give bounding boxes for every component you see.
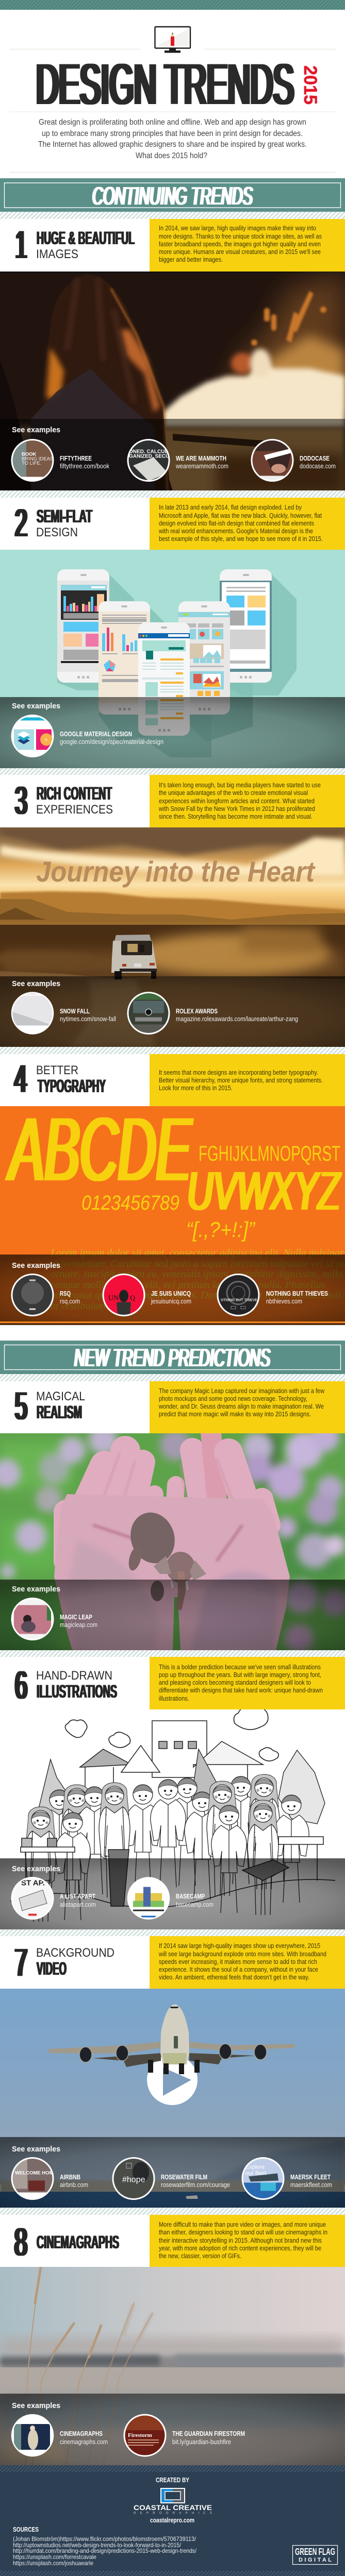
- example: snow fall: SNOW FALL: [60, 1007, 90, 1015]
- section 7 yellow description: video. An ambient, ethereal feels that doesn't get in the way.: [159, 1973, 309, 1981]
- section 6 yellow description: pop up throughout the years. But with large imagery, strong font,: [159, 1671, 321, 1679]
- example: basecamp: BASECAMP: [176, 1892, 205, 1900]
- section 4 yellow description: [150, 1054, 345, 1106]
- example: we are mammoth: ONED. CALCUL: [129, 449, 168, 454]
- example: je suis unicq: Q: [130, 1294, 135, 1302]
- example: fiftythree: BRING IDEAS: [22, 456, 53, 462]
- example: the guardian firestorm: [124, 2415, 245, 2456]
- logo: coastal creative: [134, 2488, 212, 2515]
- examples overlay: [0, 1255, 345, 1325]
- sources list: [13, 2535, 197, 2567]
- trees: [39, 1749, 325, 1824]
- sources list: https://unsplash.com/joshuaearle: [13, 2560, 93, 2567]
- photo: airplane: [0, 1989, 345, 2208]
- section 8 heading: CINEMAGRAPHS: [37, 2232, 119, 2252]
- section 7 heading: BACKGROUND: [36, 1946, 114, 1960]
- see examples label: See examples: [12, 1585, 60, 1594]
- example: nothing but thieves: OTHING BUT THIEVE: [221, 1298, 257, 1302]
- example: magic leap: MAGIC LEAP: [60, 1613, 92, 1621]
- example: the guardian firestorm: THE GUARDIAN FIRESTORM: [172, 2430, 245, 2437]
- section 3 yellow description: the unique advantages of the web to create emotional visual: [159, 789, 308, 796]
- punctuation: “[.,?+!:]”: [186, 1217, 256, 1242]
- section 7 heading: 7: [15, 1941, 27, 1985]
- example: rolex awards: magazine.rolexawards.com/laureate/arthur-zang: [176, 1015, 298, 1023]
- created by credit: CREATED BY: [156, 2476, 189, 2484]
- illustration: hand-drawn crowd: [0, 1706, 345, 1929]
- section 1 yellow description: In 2014, we saw large, high quality images make their way into: [159, 224, 316, 232]
- type specimen panel: [0, 1099, 345, 1321]
- sources list: http://uptownstudios.net/web-design-trends-to-look-forward-to-in-2015/: [13, 2541, 182, 2549]
- example: we are mammoth: [128, 440, 228, 481]
- example: rolex awards: [128, 992, 298, 1033]
- banner: new trend predictions: [0, 1341, 345, 1374]
- logo: coastal creative: COASTAL CREATIVE: [134, 2503, 212, 2512]
- example: snow fall: nytimes.com/snow-fall: [60, 1015, 116, 1023]
- numerals: 0123456789: [81, 1192, 179, 1214]
- section 6 yellow description: [150, 1657, 345, 1709]
- section 3 heading: [15, 779, 113, 823]
- buildings: [80, 1721, 263, 1803]
- grass stalks: [26, 2267, 153, 2465]
- example: rolex awards: ROLEX AWARDS: [176, 1007, 218, 1015]
- example: airbnb: WELCOME HOME: [15, 2170, 57, 2176]
- example: dodocase: dodocase.com: [300, 462, 336, 470]
- section 3 heading: RICH CONTENT: [37, 784, 112, 804]
- example: je suis unicq: JE SUIS UNICQ: [151, 1290, 191, 1297]
- hatch band: [0, 490, 345, 498]
- brush lettering: Journey into the Heart: [36, 855, 316, 888]
- section 7: background video: [0, 1936, 345, 2208]
- example: rosewater film: ROSEWATER FILM: [161, 2173, 207, 2181]
- example: airbnb: AIRBNB: [60, 2173, 80, 2181]
- section 1 heading: [15, 223, 135, 267]
- example: google material design: GOOGLE MATERIAL DESIGN: [60, 730, 132, 738]
- phone shadows: [57, 574, 297, 757]
- example: rosewater film: rosewaterfilm.com/courage: [161, 2181, 230, 2189]
- example: airbnb: airbnb.com: [60, 2181, 88, 2189]
- section 5 heading: REALISM: [37, 1402, 82, 1422]
- see examples label: See examples: [12, 2145, 60, 2154]
- section 2 heading: 2: [15, 501, 27, 545]
- example: cinemagraphs: [12, 2415, 108, 2456]
- section 8 heading: 8: [14, 2221, 27, 2264]
- section 5 heading: [15, 1384, 85, 1428]
- example: nothing but thieves: NOTHING BUT THIEVES: [266, 1290, 328, 1297]
- section 1 yellow description: bigger and better images.: [159, 256, 223, 263]
- section 7 heading: VIDEO: [37, 1959, 67, 1979]
- example: fiftythree: FIFTYTHREE: [60, 454, 92, 462]
- section 6 yellow description: This is a bolder prediction because we've seen small illustrations: [159, 1663, 321, 1671]
- example: a list apart: alistapart.com: [60, 1901, 96, 1908]
- see examples label: See examples: [12, 1262, 60, 1270]
- example: maersk fleet: our fleet: [245, 2170, 266, 2176]
- example: the guardian firestorm: Firestorm: [128, 2432, 152, 2438]
- sources list: https://unsplash.com/forrestcavale: [13, 2553, 96, 2561]
- icon: play button: [147, 2055, 198, 2105]
- section 8: cinemagraphs: [0, 2215, 345, 2465]
- examples overlay: [0, 1580, 345, 1650]
- example: magic leap: [12, 1598, 97, 1639]
- section 1: huge and beautiful images: [0, 219, 345, 495]
- section 4 heading: TYPOGRAPHY: [38, 1076, 106, 1096]
- section 4 yellow description: Look for more of this in 2015.: [159, 1084, 233, 1092]
- section 6 yellow description: illustrations.: [159, 1694, 189, 1702]
- section 3 yellow description: with Snow Fall by the New York Times in 2012 has proliferated: [158, 805, 315, 812]
- section 6 heading: HAND-DRAWN: [36, 1669, 112, 1683]
- hatch band: [0, 768, 345, 775]
- section 2 heading: [15, 501, 92, 545]
- example: a list apart: A LIST APART: [60, 1892, 95, 1900]
- section 7 yellow description: experience. It shows the soul of a company, without in your face: [159, 1965, 318, 1973]
- example: magic leap: magicleap.com: [60, 1621, 97, 1629]
- phone front: [138, 622, 190, 736]
- section 5: magical realism: [0, 1381, 345, 1654]
- see examples label: See examples: [12, 1865, 60, 1873]
- example: cinemagraphs: CINEMAGRAPHS: [60, 2430, 103, 2437]
- section 2 yellow description: [150, 498, 345, 550]
- section 4 heading: 4: [14, 1057, 27, 1101]
- phone right back: [220, 569, 272, 683]
- logo: coastal creative: REPROGRAPHICS: [134, 2511, 212, 2515]
- example: maersk fleet: Explore: [245, 2164, 265, 2170]
- example: the guardian firestorm: bit.ly/guardian-bushfire: [172, 2438, 231, 2446]
- section 7 heading: [15, 1941, 114, 1985]
- section 6 heading: 6: [15, 1664, 27, 1707]
- section 8 yellow description: the new, classier, version of GIFs.: [159, 2252, 241, 2260]
- section 4: better typography: [0, 1054, 345, 1325]
- section 6 heading: [15, 1664, 117, 1707]
- section 1 yellow description: [150, 219, 345, 272]
- intro paragraph: [38, 118, 307, 160]
- see examples label: See examples: [12, 426, 60, 434]
- tables and ground: [10, 1837, 335, 1908]
- example: dodocase: [252, 440, 336, 481]
- examples overlay: [0, 976, 345, 1047]
- phone centre left: [98, 601, 150, 715]
- hatch band: [0, 1374, 345, 1381]
- example: fiftythree: BOOK: [22, 451, 37, 457]
- hatch band: [0, 2208, 345, 2215]
- sources list: http://hurrdat.com/branding-and-design/predictions-2015-web-design-trends/: [13, 2547, 197, 2554]
- example: maersk fleet: [242, 2158, 332, 2199]
- examples overlay: [0, 2137, 345, 2208]
- sources heading: SOURCES: [13, 2526, 39, 2533]
- example: nothing but thieves: [218, 1275, 328, 1316]
- example: basecamp: basecamp.com: [176, 1901, 213, 1908]
- hatch band: [0, 1047, 345, 1054]
- section 8 yellow description: [150, 2215, 345, 2267]
- example: we are mammoth: WE ARE MAMMOTH: [176, 454, 226, 462]
- section 2 yellow description: with real world enhancements. Google's Material design is the: [158, 527, 313, 535]
- example: fiftythree: fiftythree.com/book: [60, 462, 109, 470]
- section 1 heading: 1: [15, 223, 27, 267]
- example: basecamp: [128, 1877, 213, 1919]
- example: rsq: rsq.com: [60, 1297, 80, 1305]
- top striped band: [0, 0, 345, 10]
- hatch band: [0, 1929, 345, 1936]
- year 2015, rotated: 2015: [300, 65, 320, 105]
- example: snow fall: [12, 992, 116, 1033]
- intro paragraph: What does 2015 hold?: [136, 151, 207, 160]
- hatch band: [0, 212, 345, 219]
- section 3 yellow description: since then. Storytelling has become more intimate and visual.: [159, 812, 313, 820]
- examples overlay: [0, 2394, 345, 2465]
- examples overlay: [0, 697, 345, 768]
- example: a list apart: ST AP.: [21, 1878, 45, 1888]
- logo: green flag digital: [293, 2545, 337, 2565]
- large alphabet: ABCDE: [7, 1099, 192, 1200]
- banner: continuing trends: [0, 178, 345, 212]
- clouds: [65, 1706, 278, 1761]
- hatch band: [0, 1650, 345, 1657]
- sources list: (Johan Blomström)https://www.flickr.com/photos/blomstroem/5706739113/: [13, 2535, 196, 2543]
- van: [111, 935, 157, 979]
- example: je suis unicq: UN: [108, 1294, 119, 1302]
- example: google material design: google.com/design/spec/material-design: [60, 738, 163, 745]
- example: rosewater film: #hope: [122, 2175, 145, 2184]
- lorem ipsum serif: congue mollis, tempus elit, vel pretium lectus quis nulla. Phasellus: [51, 1279, 325, 1291]
- section 3: rich content experiences: [0, 775, 345, 1047]
- section 6 heading: ILLUSTRATIONS: [37, 1682, 117, 1702]
- examples overlay: [0, 1858, 345, 1929]
- example: a list apart: [12, 1877, 96, 1919]
- section 6 yellow description: and pleasing colors becoming standard designers will look to: [159, 1679, 311, 1686]
- section 2 yellow description: In late 2013 and early 2014, flat design exploded. Led by: [159, 503, 302, 511]
- elephant: [124, 1506, 206, 1610]
- lorem ipsum serif: consequat quam, vestibulum mattis. Donec sit amet lorem massa. Duis: [51, 1290, 342, 1301]
- example: google material design: [12, 715, 163, 756]
- hand: palms: [54, 1494, 290, 1650]
- section 2 heading: DESIGN: [36, 526, 78, 539]
- section 8 heading: [14, 2221, 119, 2264]
- section 3 heading: 3: [15, 779, 27, 823]
- hand: fingers: [66, 1427, 269, 1561]
- illustration: flat phones: [0, 550, 345, 768]
- see examples label: See examples: [12, 702, 60, 710]
- see examples label: See examples: [12, 2402, 60, 2410]
- examples overlay: [0, 419, 345, 490]
- see examples label: See examples: [12, 980, 60, 988]
- example: we are mammoth: wearemammoth.com: [175, 462, 228, 470]
- phone left back: [57, 569, 109, 683]
- section 5 yellow description: [150, 1381, 345, 1433]
- example: cinemagraphs: cinemagraphs.com: [60, 2438, 108, 2446]
- section 3 heading: EXPERIENCES: [36, 803, 113, 817]
- example: je suis unicq: jesuisunicq.com: [151, 1297, 191, 1305]
- section 5 heading: 5: [15, 1384, 27, 1428]
- section 8 yellow description: year, with more adoption of rich content experiences, they will be: [159, 2244, 321, 2252]
- section 7 yellow description: speeds ever increasing, it makes more sense to add to that rich: [159, 1958, 317, 1965]
- company url: coastalrepro.com: [150, 2516, 194, 2524]
- section 5 heading: MAGICAL: [36, 1389, 85, 1403]
- example: dodocase: DODOCASE: [300, 454, 330, 462]
- section 1 heading: IMAGES: [36, 247, 78, 261]
- example: we are mammoth: GANIZED. SECU: [129, 453, 169, 460]
- section 4 yellow description: It seems that more designs are incorporating better typography.: [159, 1069, 318, 1076]
- photo: elephant in hands: [0, 1423, 345, 1654]
- lorem ipsum serif: [50, 1247, 345, 1312]
- lorem ipsum serif: at vestibulum nisi.: [51, 1300, 126, 1312]
- section 5 yellow description: photo mockups and some good news coverage. Technology,: [159, 1395, 307, 1402]
- section 3 yellow description: [150, 775, 345, 827]
- example: je suis unicq: [103, 1275, 191, 1316]
- example: rosewater film: [113, 2158, 230, 2199]
- airplane: [48, 2004, 295, 2074]
- example: google material design: +: [44, 737, 47, 743]
- section 8 yellow description: their interactive storytelling in 2015. Although not brand new this: [159, 2236, 322, 2244]
- section 2 yellow description: design evolved into flat-ish design that combined flat elements: [159, 519, 314, 527]
- photo: grass stalks and fog: [0, 2267, 345, 2465]
- section 5 yellow description: predict that more magic will make its way into 2015 designs.: [159, 1410, 311, 1418]
- section 2: semi-flat design: [0, 498, 345, 768]
- example: rsq: [12, 1275, 80, 1316]
- crowd figures: [25, 1774, 309, 1922]
- section 3 yellow description: experiences within longform articles and content. What started: [159, 797, 315, 805]
- logo: green flag digital: DIGITAL: [299, 2557, 332, 2563]
- example: maersk fleet: MAERSK FLEET: [290, 2173, 331, 2181]
- section 2 heading: SEMI-FLAT: [37, 506, 92, 527]
- intro paragraph: up to embrace many strong principles that have been in print design for decades.: [42, 129, 303, 138]
- photo: van in desert: [0, 827, 345, 1047]
- header divider rules: [9, 48, 336, 173]
- footer: [0, 2465, 345, 2576]
- intro paragraph: Great design is proliferating both online and offline. Web and app design has grown: [39, 118, 306, 127]
- section 3 yellow description: It's taken long enough, but big media players have started to use: [159, 781, 321, 789]
- example: airbnb: [12, 2158, 88, 2199]
- example: fiftythree: [12, 440, 109, 481]
- example: maersk fleet: maerskfleet.com: [290, 2181, 332, 2189]
- intro paragraph: The Internet has allowed graphic designers to share and be inspired by great works.: [38, 140, 307, 149]
- example: fiftythree: TO LIFE.: [22, 461, 41, 466]
- section 6: hand-drawn illustrations: [0, 1657, 345, 1929]
- section 7 yellow description: [150, 1936, 345, 1989]
- section 4 heading: BETTER: [36, 1063, 78, 1077]
- icon: monitor with pencil: [155, 27, 190, 53]
- photo: girl by fire: [0, 272, 345, 495]
- example: rsq: RSQ: [60, 1290, 71, 1297]
- section 4 heading: [14, 1057, 106, 1101]
- section 1 heading: HUGE & BEAUTIFUL: [37, 228, 135, 248]
- example: nothing but thieves: nbthieves.com: [266, 1297, 302, 1305]
- phone centre right: [178, 601, 230, 715]
